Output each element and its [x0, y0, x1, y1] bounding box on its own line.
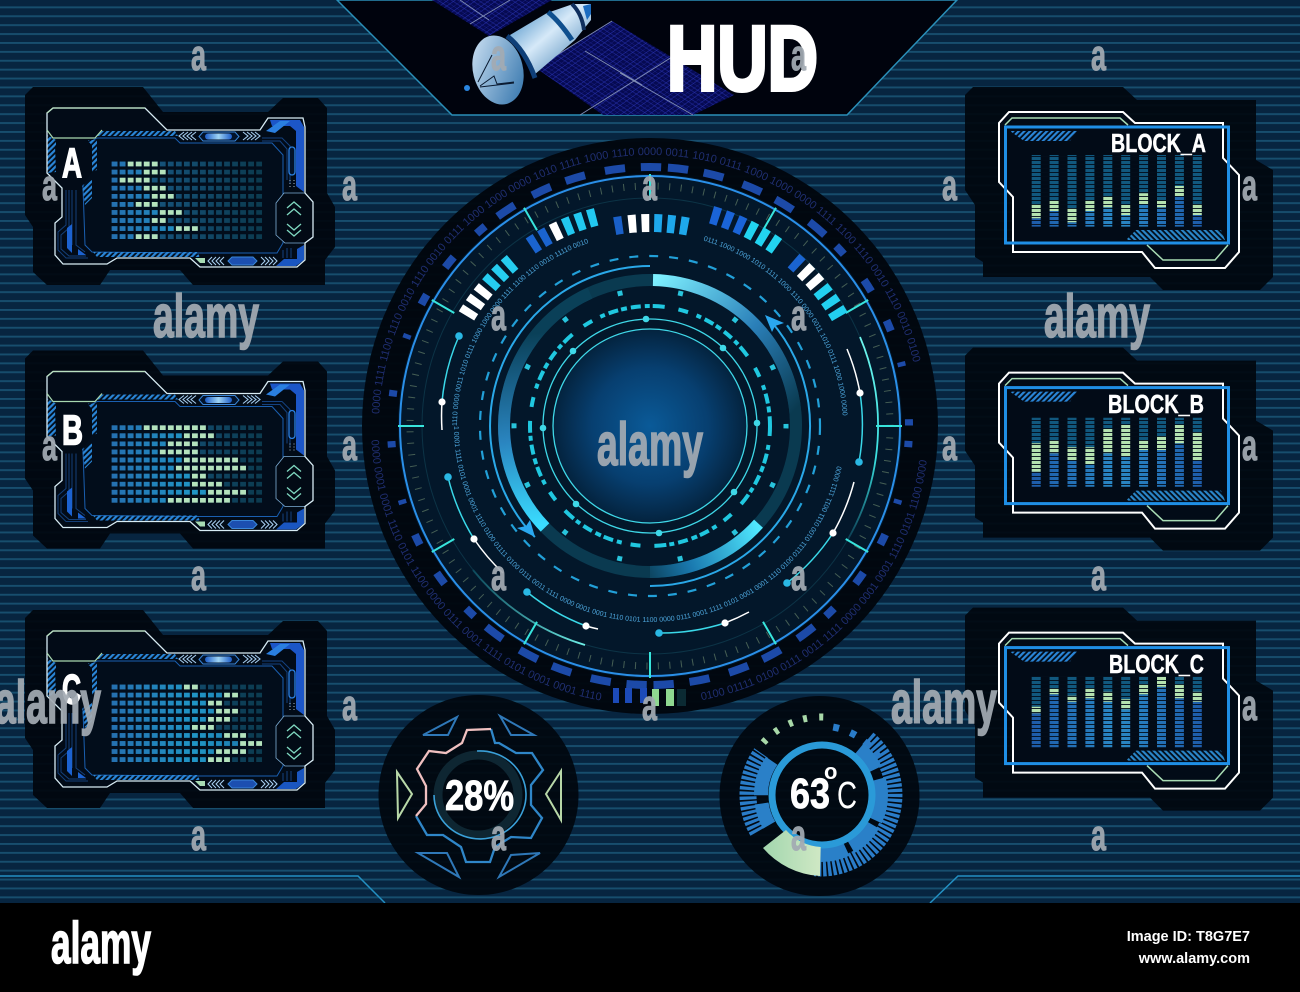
- frame B: [25, 350, 335, 548]
- corner triangles: [418, 716, 540, 877]
- segment bars right: [431, 207, 869, 645]
- watermarks: a: [491, 811, 506, 860]
- header banner with satellite and HUD title: [337, 0, 957, 115]
- watermarks: a: [791, 31, 806, 80]
- central radar dial: [362, 138, 938, 714]
- matrix chart B: [112, 428, 264, 500]
- heading BLOCK_B: BLOCK_B: [1108, 389, 1204, 419]
- panel: BLOCK_B: [965, 348, 1273, 551]
- blue perimeter ring: [400, 176, 900, 676]
- bar chart BLOCK_B: [1031, 417, 1203, 487]
- footer bar: [0, 903, 1300, 992]
- top dots: [743, 717, 899, 873]
- image id: Image ID: T8G7E7: [1127, 929, 1250, 945]
- inner binary ring: 1 0001 1111 0101 0001 0001 1110 0100 01111 0100 0111 0011 1111 0000 0001 0001 1110 0101 1100 0000 0111 0001 1111 0101 0001 0001 1110 0100 01111 0100 0111 0011 1111 0000: [454, 426, 842, 622]
- watermarks: a: [791, 811, 806, 860]
- watermarks: a: [342, 421, 357, 470]
- watermarks: a: [342, 681, 357, 730]
- small square markers: [514, 290, 786, 562]
- scale ticks: [410, 186, 890, 666]
- label C: C: [62, 666, 81, 712]
- dashed ring: [480, 256, 820, 596]
- block ring: [761, 735, 881, 855]
- frame BLOCK_A: [965, 87, 1273, 290]
- frame C: [25, 610, 335, 808]
- watermarks: a: [491, 31, 506, 80]
- tick arcs: [748, 739, 894, 868]
- node lines: [438, 332, 864, 637]
- segment bars upper left: [436, 212, 864, 640]
- watermarks: alamy: [891, 669, 997, 736]
- inner binary ring: 1110 0000 0011 1010 0111 1000 1000 0000 1111 1100 1110 0010 11110 0010: [452, 238, 588, 426]
- heading BLOCK_A: BLOCK_A: [1111, 128, 1206, 158]
- watermarks: a: [491, 291, 506, 340]
- watermarks: a: [1242, 161, 1257, 210]
- segment bars upper left 2: [434, 210, 866, 642]
- outer binary ring: 0100 01111 0100 0111 0011 1111 0000 0001 0001 1110 0101 1100 0000: [701, 460, 926, 700]
- watermarks: a: [191, 551, 206, 600]
- panel: A: [25, 87, 335, 285]
- outer blue dash ring: [391, 167, 909, 685]
- value 63 C: o: [824, 759, 837, 784]
- watermarks: a: [1242, 421, 1257, 470]
- segment bars upper right: [430, 206, 870, 646]
- value 28%: 28%: [445, 772, 514, 820]
- watermarks: a: [191, 811, 206, 860]
- watermarks: a: [642, 161, 657, 210]
- watermarks: a: [942, 421, 957, 470]
- watermarks: alamy: [1044, 283, 1150, 350]
- watermarks: a: [1242, 681, 1257, 730]
- watermarks: a: [791, 291, 806, 340]
- icon: satellite: [432, 0, 734, 115]
- label A: A: [62, 140, 82, 186]
- watermarks: a: [1091, 811, 1106, 860]
- panel: BLOCK_C: [965, 608, 1273, 811]
- watermarks: a: [42, 421, 57, 470]
- bottom status blocks: [613, 688, 686, 706]
- watermarks: a: [642, 681, 657, 730]
- watermarks: a: [491, 551, 506, 600]
- matrix chart C: [112, 687, 264, 760]
- watermarks: a: [342, 161, 357, 210]
- bottom corner accents: [0, 876, 1300, 903]
- watermarks: alamy: [0, 669, 101, 736]
- watermarks: a: [191, 31, 206, 80]
- gauge: 63C: [720, 696, 920, 896]
- gauge: 28%: [378, 695, 578, 895]
- watermarks: a: [1091, 31, 1106, 80]
- hub disc: [540, 316, 760, 536]
- segment bars top: [447, 223, 853, 629]
- panel: BLOCK_A: [965, 87, 1273, 290]
- watermarks: a: [1091, 551, 1106, 600]
- inner binary ring: 0111 1000 1000 1010 1111 1000 1110 0000 0011 1010 0111 1000 1000 0000: [704, 236, 848, 416]
- gradient band: [504, 280, 796, 572]
- panel: B: [25, 350, 335, 548]
- label B: B: [62, 406, 83, 454]
- cyan code ring: [530, 306, 770, 546]
- watermarks: a: [791, 551, 806, 600]
- panel: C: [25, 610, 335, 808]
- value 63 C: [790, 759, 857, 818]
- footer logo: alamy: [51, 911, 151, 976]
- icon: gear outline: [416, 729, 543, 862]
- blue ring with arrows: [490, 266, 810, 586]
- side triangles: [397, 771, 561, 820]
- watermarks: alamy: [153, 283, 259, 350]
- website: www.alamy.com: [1138, 951, 1250, 967]
- cyan markers every 30 degrees: [398, 174, 902, 678]
- frame BLOCK_B: [965, 348, 1273, 551]
- heading BLOCK_C: BLOCK_C: [1109, 649, 1204, 679]
- title: HUD: [667, 8, 818, 110]
- watermarks: a: [942, 161, 957, 210]
- bar chart BLOCK_C: [1031, 676, 1203, 748]
- outer binary ring: 0000 0001 0001 1110 0101 1100 0000 0111 0001 1111 0101 0001 0001 1110: [372, 440, 602, 700]
- green sector: [763, 830, 821, 876]
- value 63 C: C: [837, 775, 857, 817]
- matrix chart A: [112, 164, 264, 237]
- outer binary ring: 0000 1111 1100 1110 0010 1110 0010 0111 1000 1000 0000 1010 1111 1000 1110 0000 0011 1010 0111 1000 1000 0000 1111 1100 1110 0010 1110 0010 0100: [372, 147, 920, 414]
- frame BLOCK_C: [965, 608, 1273, 811]
- bar chart BLOCK_A: [1031, 155, 1203, 227]
- frame A: [25, 87, 335, 285]
- bright cyan arcs: [473, 337, 878, 645]
- progress ring: [438, 755, 518, 835]
- watermarks: a: [42, 161, 57, 210]
- bright ring: [772, 745, 872, 845]
- value 63 C: 63: [790, 770, 830, 818]
- watermarks: alamy: [597, 411, 703, 478]
- outer binary ring: [372, 147, 926, 700]
- inner binary ring: [452, 236, 848, 622]
